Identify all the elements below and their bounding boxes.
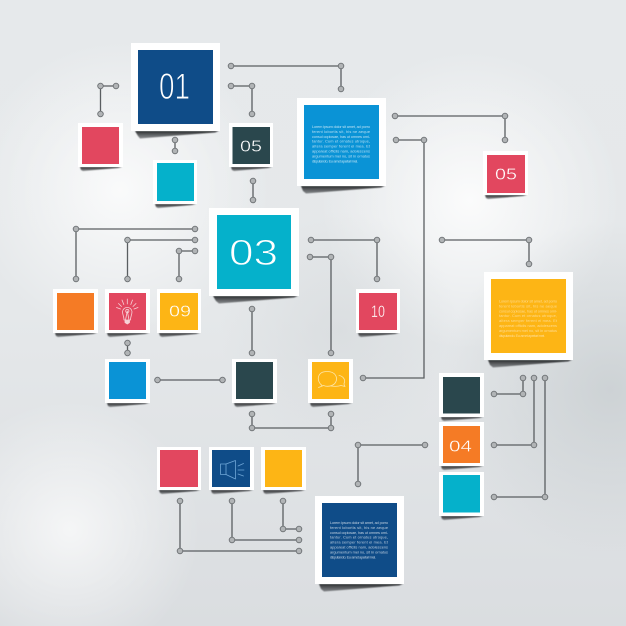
body text: disputando. Eu amet aperiari mei. [312, 158, 358, 163]
card: 05 dark [229, 123, 273, 171]
body text: disputando. Eu amet aperiari mei. [330, 554, 376, 559]
body text: argumentum mei no, sit in ornatus [499, 328, 557, 333]
body text: consul copiosae, has ut omnes omi- [499, 308, 558, 313]
card: blue text [297, 98, 386, 194]
number 04: 04 [449, 438, 472, 456]
body text: Lorem ipsum dolor sit amet, ad porro [499, 298, 557, 304]
body text: ferent lobortis sit, his ne aeque [499, 303, 557, 308]
card: dark right [439, 373, 484, 421]
body text: argumentum mei no, sit in ornatus [312, 153, 370, 158]
body text: appareat officiis nam, adolescens [499, 323, 557, 328]
body text: ferent lobortis sit, his ne aeque [330, 525, 388, 530]
body text: tantur. Cum et ornatus utroque, [499, 313, 557, 318]
number 05: 05 [240, 138, 262, 156]
body text: appareat officiis nam, adolescens [312, 148, 370, 154]
body text [330, 520, 389, 559]
icon: speech bubbles [318, 372, 345, 388]
body text: consul copiosae, has ut omnes omi- [330, 530, 389, 535]
card: yellow text [484, 272, 573, 368]
number 03: 03 [229, 232, 278, 273]
body text: tantur. Cum et ornatus utroque, [312, 139, 370, 144]
body text [499, 298, 558, 338]
card: cyan right [439, 472, 484, 520]
card: red bottom [157, 447, 201, 494]
number 09: 09 [169, 304, 191, 320]
card: yellow bottom [261, 447, 306, 494]
card: navy text [315, 496, 404, 592]
card: 04 [439, 422, 484, 470]
icon: light bulb [116, 299, 138, 324]
card: navy with speaker [209, 447, 254, 494]
card: 05 red [483, 151, 528, 199]
card: orange [53, 289, 98, 337]
number 10: 10 [371, 302, 385, 321]
card: cyan small [153, 160, 197, 208]
body text: tantur. Cum et ornatus utroque, [330, 535, 388, 540]
body text: Lorem ipsum dolor sit amet, ad porro [312, 124, 370, 129]
body text: consul copiosae, has ut omnes omi- [312, 134, 371, 139]
body text: altera semper ferent ei mea. Et [330, 540, 389, 545]
body text: altera semper ferent ei mea. Et [312, 144, 371, 149]
body text: appareat officiis nam, adolescens [330, 544, 388, 550]
card: 01 [131, 43, 220, 138]
connector nodes [73, 63, 548, 554]
body text: argumentum mei no, sit in ornatus [330, 549, 388, 554]
number 05: 05 [495, 166, 517, 184]
body text [312, 124, 371, 163]
body text: altera semper ferent ei mea. Et [499, 318, 558, 323]
body text: Lorem ipsum dolor sit amet, ad porro [330, 520, 388, 525]
card: 03 [209, 208, 299, 304]
card: 10 [356, 289, 400, 337]
card: red small [78, 123, 123, 171]
body text: disputando. Eu amet aperiari mei. [499, 333, 545, 338]
card: blue small [105, 359, 150, 407]
card: red with bulb [105, 289, 150, 337]
icon: speaker [220, 460, 244, 479]
card: 09 [157, 289, 201, 337]
number 01: 01 [159, 66, 190, 107]
card: yellow with chat [308, 359, 353, 407]
body text: ferent lobortis sit, his ne aeque [312, 129, 370, 134]
connector lines [76, 66, 545, 551]
card: dark small [232, 359, 277, 407]
